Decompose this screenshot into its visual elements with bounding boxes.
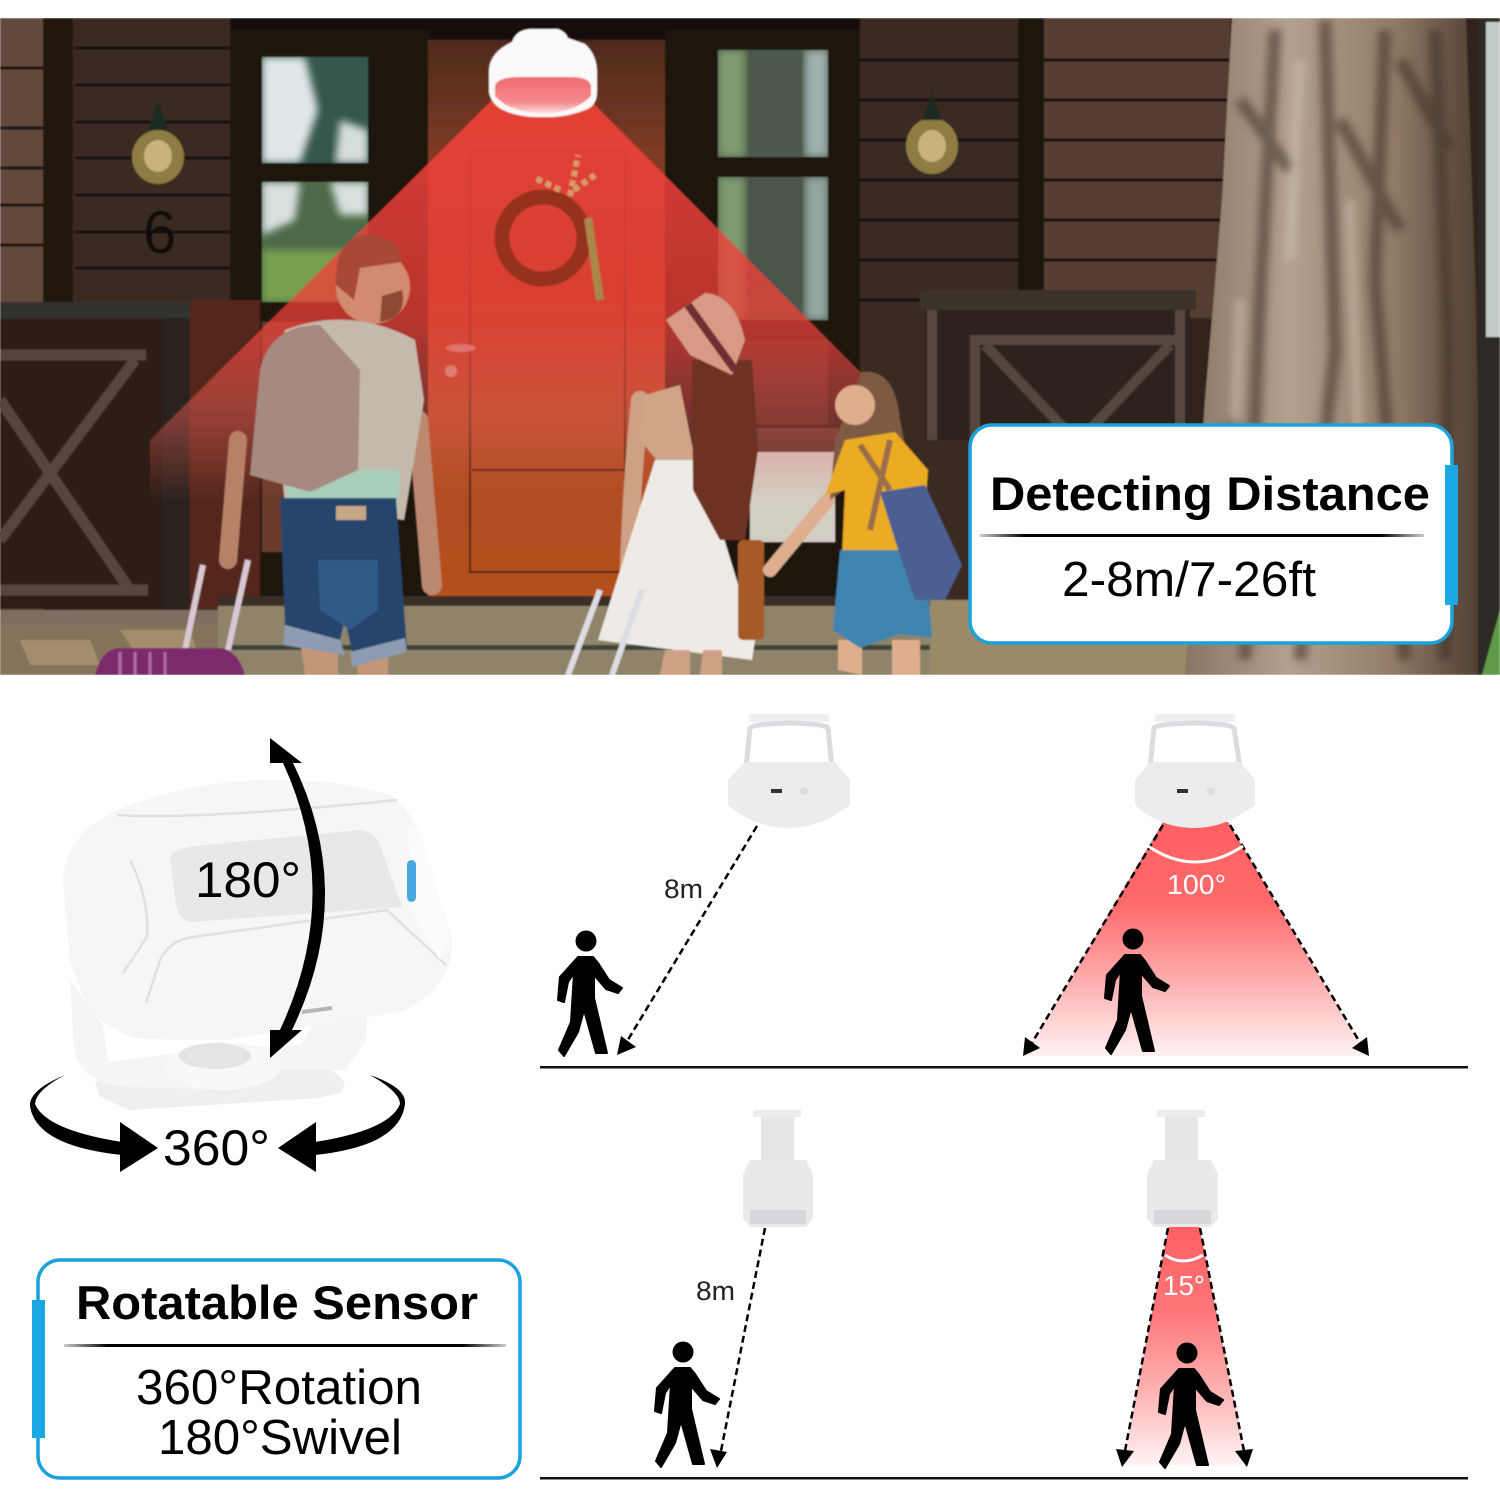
sensor slot xyxy=(302,1006,332,1014)
beam edge lines xyxy=(1030,825,1362,1046)
side pad xyxy=(408,826,450,960)
right suitcase handle xyxy=(568,590,642,675)
sensor stand xyxy=(70,980,367,1090)
tree trunk xyxy=(1185,18,1500,675)
callout heading: Detecting Distance xyxy=(990,467,1430,520)
left window xyxy=(190,30,430,610)
red beam xyxy=(1122,1225,1247,1465)
house number: 6 xyxy=(143,199,176,266)
arrowhead xyxy=(617,1036,636,1055)
callout heading: Rotatable Sensor xyxy=(76,1276,478,1329)
front door xyxy=(428,30,860,600)
house wall xyxy=(0,18,1480,611)
diagram: horizontal mount distance xyxy=(558,714,850,1056)
distance label: 8m xyxy=(696,1276,735,1306)
mount sensor xyxy=(728,714,850,828)
person xyxy=(558,930,622,1056)
distance label: 8m xyxy=(664,874,703,904)
person xyxy=(1159,1342,1223,1468)
callout swivel line: 180°Swivel xyxy=(158,1411,402,1465)
callout value: 2-8m/7-26ft xyxy=(1062,553,1316,607)
blue indicator xyxy=(407,860,416,902)
rotation label: 360° xyxy=(163,1120,270,1176)
product: rotatable sensor xyxy=(30,738,452,1176)
wreath xyxy=(502,155,600,300)
mount sensor xyxy=(743,1110,813,1227)
swivel label: 180° xyxy=(195,852,301,908)
floor line upper xyxy=(540,1066,1468,1068)
left railing xyxy=(0,302,190,609)
red beam xyxy=(1025,822,1367,1056)
angle arc xyxy=(1165,1255,1203,1261)
rotation arrow left xyxy=(30,1075,158,1172)
wall lamps xyxy=(132,92,958,184)
left suitcase xyxy=(95,560,248,675)
callout: rotatable sensor xyxy=(32,1260,520,1478)
person xyxy=(655,1342,719,1467)
distance line xyxy=(720,1228,765,1456)
arrowhead xyxy=(710,1449,727,1468)
rotation arrow right xyxy=(278,1075,405,1172)
girl xyxy=(770,372,962,675)
beam edge lines xyxy=(1124,1228,1245,1456)
floor line lower xyxy=(540,1477,1468,1480)
photo: family at the front door xyxy=(0,18,1500,675)
distance line xyxy=(623,826,757,1048)
red detection beam xyxy=(150,100,880,500)
angle label: 15° xyxy=(1163,1270,1205,1301)
callout rotation line: 360°Rotation xyxy=(136,1361,422,1415)
sensor creases xyxy=(117,800,446,1003)
ledge and steps xyxy=(0,596,1190,675)
sensor lens window xyxy=(170,830,402,922)
man xyxy=(228,234,432,675)
sensor body xyxy=(63,780,452,1040)
diagram: vertical mount distance xyxy=(655,1110,813,1468)
right railing xyxy=(920,290,1196,440)
ceiling sensor xyxy=(489,29,597,117)
person xyxy=(1105,928,1169,1054)
diagram: horizontal mount 100 degree beam xyxy=(1023,714,1369,1056)
arrowheads xyxy=(1116,1449,1253,1467)
top door beam xyxy=(230,18,860,40)
angle label: 100° xyxy=(1167,869,1226,900)
angle arc xyxy=(1148,846,1243,862)
callout: detecting distance xyxy=(970,425,1458,643)
mount sensor xyxy=(1147,1110,1218,1227)
swivel arrow xyxy=(270,738,325,1058)
woman xyxy=(598,293,764,675)
diagram: vertical mount 15 degree beam xyxy=(1116,1110,1253,1468)
mount sensor xyxy=(1135,714,1255,828)
sensor base plate xyxy=(95,1068,345,1110)
right window xyxy=(718,50,838,542)
arrowheads xyxy=(1023,1037,1369,1056)
